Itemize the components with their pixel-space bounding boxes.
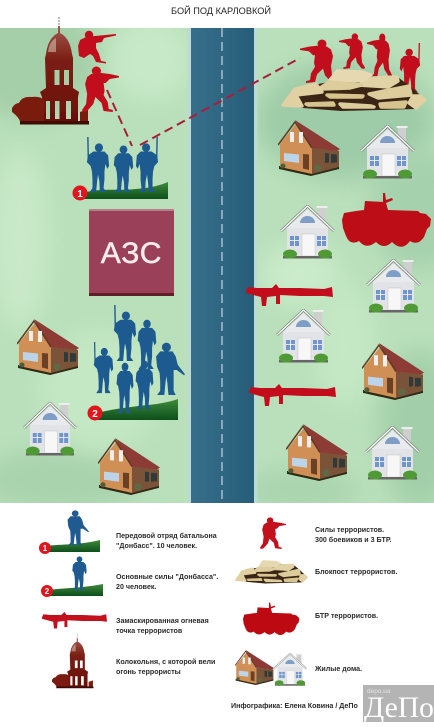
legend: terrorist forces	[260, 517, 391, 549]
legend: forward detachment: Передовой отряд батальона	[116, 532, 217, 540]
houses right	[277, 120, 424, 481]
terrain background	[0, 0, 434, 510]
watermark: ДеПо	[364, 691, 434, 724]
legend: firing point: Замаскированная огневая	[116, 617, 209, 625]
legend: forward detachment	[39, 510, 217, 554]
legend: armored vehicle	[243, 603, 378, 635]
panel: battle map	[0, 0, 434, 510]
legend: bell tower: Колокольня, с которой вели	[116, 658, 215, 666]
legend: terrorist forces: Силы террористов.	[315, 526, 384, 534]
gas station АЗС: АЗС	[101, 237, 162, 270]
legend: firing point	[42, 612, 209, 635]
bell tower	[12, 17, 89, 124]
houses left	[17, 319, 160, 495]
terrorists on checkpoint	[300, 33, 420, 92]
watermark: depo.ua	[367, 688, 391, 695]
legend: forward detachment: 1	[43, 544, 48, 553]
legend: forward detachment: "Донбасс". 10 человек.	[116, 542, 197, 550]
legend: main forces: Основные силы "Донбасса".	[116, 573, 218, 581]
hill 2	[95, 399, 178, 420]
panel: legend	[39, 510, 397, 688]
main forces 2	[88, 305, 185, 420]
firing line	[107, 58, 300, 146]
terrorists at bell tower	[78, 31, 119, 112]
armored vehicle	[342, 193, 431, 247]
badge 2: 2	[92, 409, 98, 420]
legend: checkpoint: Блокпост террористов.	[315, 568, 397, 576]
legend: houses: Жилые дома.	[314, 665, 362, 673]
legend: checkpoint	[236, 561, 397, 583]
legend: houses	[235, 650, 362, 686]
legend: main forces	[41, 556, 218, 597]
legend: main forces: 20 человек.	[116, 583, 156, 591]
road	[188, 28, 258, 503]
legend: main forces: 2	[45, 587, 50, 596]
legend: bell tower	[52, 634, 215, 688]
legend: armored vehicle: БТР террористов.	[315, 612, 378, 620]
legend: firing point: точка террористов	[116, 627, 183, 635]
title: БОЙ ПОД КАРЛОВКОЙ	[171, 5, 271, 16]
credit: Инфографика: Елена Ковина / ДеПо	[231, 702, 358, 710]
legend: terrorist forces: 300 боевиков и 3 БТР.	[315, 536, 391, 544]
checkpoint sandbags	[283, 71, 426, 111]
grenade launcher 1	[246, 284, 333, 306]
forward detachment 1	[72, 137, 168, 200]
hill 1	[84, 182, 168, 199]
badge 1: 1	[77, 189, 83, 200]
legend: bell tower: огонь террористы	[116, 668, 181, 676]
gas station АЗС	[89, 209, 174, 296]
grenade launcher 2	[249, 384, 336, 406]
